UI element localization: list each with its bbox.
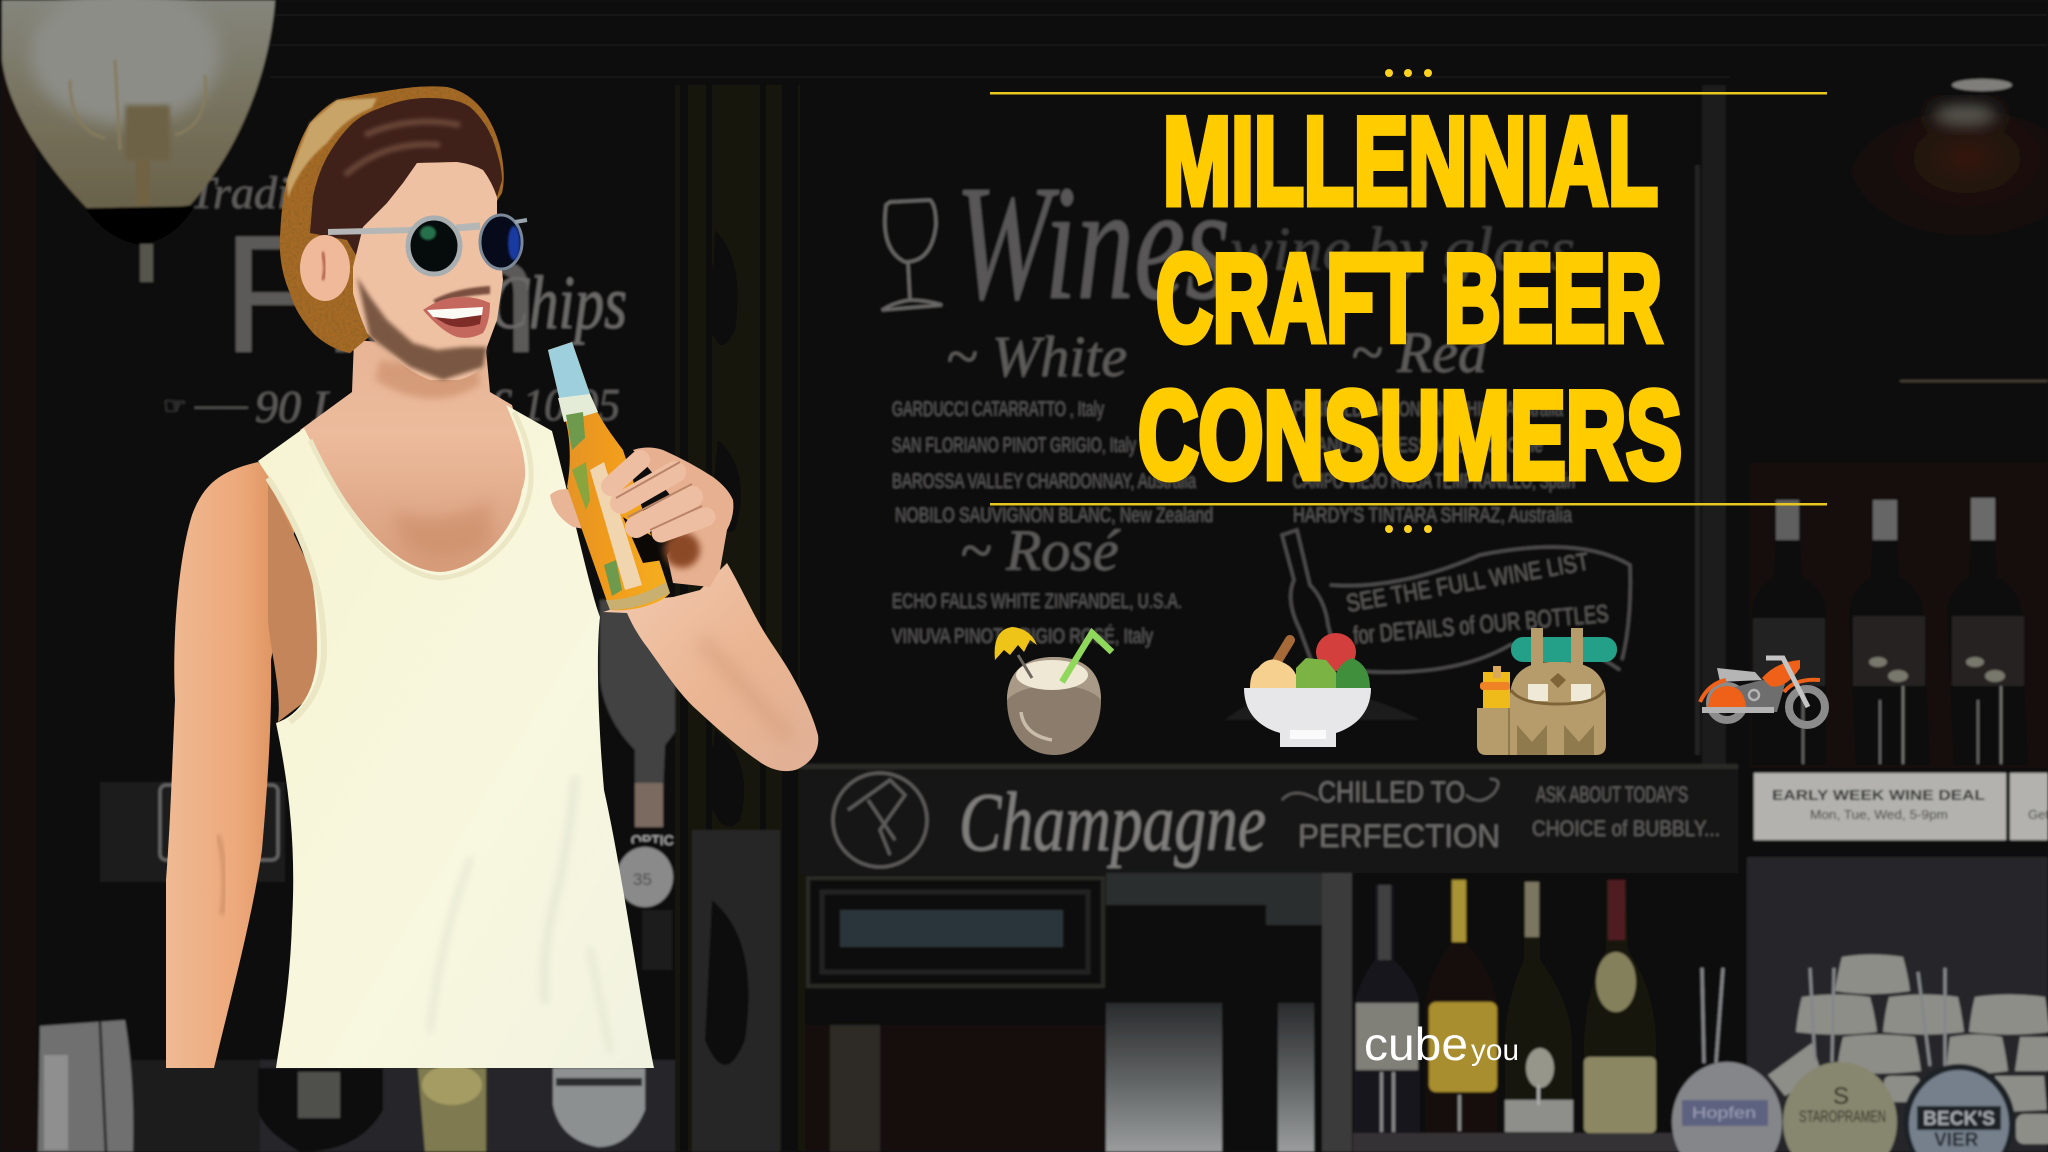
icon: motorcycle bbox=[1700, 658, 1825, 725]
right wall and signs: Mon, Tue, Wed, 5-9pm bbox=[1810, 807, 1948, 822]
icon: backpack bbox=[1477, 628, 1617, 755]
wines chalkboard lettering: ECHO FALLS WHITE ZINFANDEL, U.S.A. bbox=[892, 590, 1182, 613]
hat highlight bbox=[287, 98, 377, 198]
bottle and banner sketch bbox=[1282, 530, 1630, 698]
wines chalkboard lettering: SAN FLORIANO PINOT GRIGIO, Italy bbox=[892, 434, 1136, 457]
ear bbox=[300, 235, 350, 301]
champagne band: CHILLED TO bbox=[1318, 776, 1465, 809]
wines chalkboard lettering: GARDUCCI CATARRATTO , Italy bbox=[892, 398, 1104, 421]
wines chalkboard lettering: ~ White bbox=[946, 324, 1127, 389]
wine bottles on the right shelf bbox=[1752, 498, 2028, 765]
hand with fingers bbox=[611, 448, 733, 587]
logo: cubeyou: cube bbox=[1364, 1018, 1468, 1070]
wines chalkboard lettering: wine by glass bbox=[1230, 216, 1575, 284]
left chalkboard lettering: ☞ —— bbox=[163, 393, 248, 420]
wines chalkboard lettering bbox=[882, 151, 1630, 720]
wines chalkboard lettering: ~ Rosé bbox=[960, 518, 1121, 583]
wines chalkboard lettering: ~ Red bbox=[1351, 320, 1488, 385]
wines chalkboard lettering: NOBILO SAUVIGNON BLANC, New Zealand bbox=[895, 504, 1213, 527]
wines chalkboard lettering: for DETAILS of OUR BOTTLES bbox=[1352, 600, 1610, 650]
logo: cubeyou: you bbox=[1471, 1034, 1519, 1067]
beard bbox=[357, 277, 487, 380]
top dots bbox=[1385, 69, 1432, 77]
left chalkboard bbox=[118, 100, 678, 690]
lower centre cabinet bbox=[805, 874, 1108, 1152]
hair highlights bbox=[345, 122, 460, 175]
left chalkboard lettering: Chips bbox=[490, 261, 627, 345]
wines chalkboard lettering: HARDY'S TINTARA SHIRAZ, Australia bbox=[1293, 504, 1572, 527]
lower left cabinet bbox=[36, 690, 680, 1152]
bottom dots bbox=[1385, 525, 1432, 533]
wine glass sketch bbox=[882, 200, 942, 310]
hanging optic bottle bbox=[600, 600, 700, 970]
beer taps: S bbox=[1833, 1083, 1849, 1110]
hat bbox=[280, 86, 504, 353]
left chalkboard lettering: £ 10.95 bbox=[490, 379, 620, 430]
wines chalkboard lettering: VINUVA PINOT GRIGIO ROSÉ, Italy bbox=[892, 625, 1153, 648]
champagne band bbox=[800, 764, 1738, 874]
ornate column bbox=[675, 85, 805, 1152]
beer taps: VIER bbox=[1934, 1130, 1979, 1151]
title block bbox=[990, 69, 1827, 533]
ceiling moulding bbox=[270, 0, 2048, 85]
wines chalkboard lettering: SEE THE FULL WINE LIST bbox=[1344, 548, 1591, 618]
main chalkboard frame bbox=[800, 85, 1730, 775]
thumb behind the bottle bbox=[550, 489, 590, 530]
beer taps: STAROPRAMEN bbox=[1799, 1107, 1886, 1126]
neck shadow bbox=[375, 360, 480, 399]
right wall and signs bbox=[1736, 768, 2048, 1152]
mirror and glass bbox=[1106, 873, 1352, 1152]
left pillar bbox=[0, 60, 36, 1152]
wines chalkboard lettering: GRAND EXPRESS MALBEC, Chile bbox=[1293, 434, 1543, 457]
moustache bbox=[433, 286, 490, 304]
torso skin in the armhole bbox=[268, 480, 325, 722]
lamp bbox=[2, 0, 275, 282]
arm crease bbox=[218, 835, 224, 915]
lips bbox=[423, 297, 490, 338]
bottom rule bbox=[990, 503, 1827, 506]
man drinking a beer bbox=[166, 86, 818, 1068]
champagne band: Champagne bbox=[959, 776, 1266, 869]
left arm bbox=[166, 462, 300, 1068]
wines chalkboard lettering: Wines bbox=[955, 151, 1230, 334]
tank folds bbox=[430, 780, 610, 1050]
centre wine bottles bbox=[1353, 873, 1748, 1152]
left chalkboard lettering: Traditional bbox=[190, 167, 397, 218]
sunglasses bbox=[328, 215, 527, 274]
teeth bbox=[427, 307, 483, 319]
top rule bbox=[990, 92, 1827, 94]
chest shadow bbox=[390, 500, 490, 558]
title: three lines bbox=[1138, 93, 1682, 505]
beer taps: BECK'S bbox=[1923, 1108, 1995, 1130]
cups stack bbox=[1768, 954, 2048, 1144]
bottles under the man bbox=[258, 1065, 645, 1152]
left chalkboard lettering bbox=[163, 167, 627, 432]
beer taps: Hopfen bbox=[1692, 1105, 1756, 1122]
icon: salad bowl bbox=[1244, 633, 1371, 747]
tank top bbox=[258, 405, 654, 1068]
title: three lines: MILLENNIAL bbox=[1163, 93, 1658, 231]
title: three lines: CRAFT BEER bbox=[1156, 230, 1662, 368]
right upper cabinet bbox=[1730, 60, 2048, 770]
hanging optic bottle: OPTIC bbox=[631, 832, 674, 848]
wines chalkboard lettering: BAROSSA VALLEY CHARDONNAY, Australia bbox=[892, 470, 1196, 493]
arm shading bbox=[700, 640, 790, 740]
icon: coconut drink bbox=[995, 627, 1112, 755]
champagne band: PERFECTION bbox=[1298, 818, 1500, 854]
title: three lines: CONSUMERS bbox=[1138, 367, 1682, 505]
hanging optic bottle: 35 bbox=[633, 870, 652, 889]
beer taps bbox=[1672, 968, 2015, 1152]
right arm bbox=[603, 563, 818, 771]
right wall and signs: EARLY WEEK WINE DEAL bbox=[1772, 787, 1985, 804]
champagne band: ASK ABOUT TODAY'S bbox=[1536, 782, 1688, 807]
phone on wall bbox=[38, 1020, 133, 1152]
right column bbox=[1702, 85, 1726, 770]
champagne band: CHOICE of BUBBLY... bbox=[1532, 816, 1720, 841]
wines chalkboard lettering: CAMPO VIEJO RIOJA TEMPRANILLO, Spain bbox=[1293, 470, 1575, 493]
beer bottle bbox=[548, 342, 670, 610]
wines chalkboard lettering: PENFOLDS KOONUNGA HILL, Australia bbox=[1293, 398, 1563, 421]
left chalkboard lettering: Fish bbox=[222, 200, 539, 388]
face bbox=[353, 162, 503, 380]
neck and chest bbox=[300, 340, 532, 580]
mouth interior bbox=[432, 312, 482, 327]
logo: cubeyou bbox=[1364, 1018, 1519, 1070]
left chalkboard lettering: 90 L bbox=[255, 381, 338, 432]
hair bbox=[310, 98, 502, 267]
